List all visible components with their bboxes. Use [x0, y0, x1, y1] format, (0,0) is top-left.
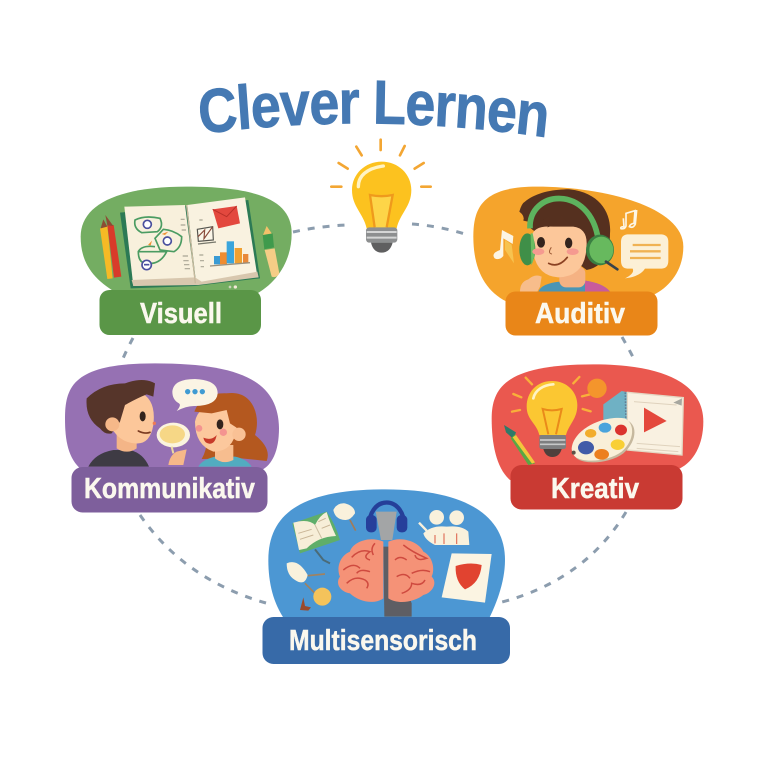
- label: Kreativ: [510, 465, 682, 510]
- label: Kommunikativ: Kommunikativ: [84, 473, 255, 505]
- icon: central light bulb: [331, 140, 431, 253]
- label: Auditiv: [506, 292, 658, 336]
- label: Visuell: [100, 290, 261, 335]
- illustration: open book and pencils: [81, 187, 292, 302]
- illustration: brain with senses: [268, 489, 505, 620]
- title: Clever Lernen: [200, 80, 546, 138]
- panel: Kommunikativ: [65, 363, 279, 512]
- label: Multisensorisch: [262, 617, 510, 664]
- dashed connector ring: [121, 224, 636, 603]
- illustration: two people talking: [65, 363, 279, 470]
- panel: Kreativ: [492, 364, 703, 510]
- panel: Visuell: [81, 187, 292, 335]
- title: [200, 80, 546, 138]
- label: Visuell: Visuell: [140, 298, 222, 330]
- panel: Auditiv: [473, 187, 683, 336]
- label: Kommunikativ: [72, 467, 268, 512]
- illustration: boy with headphones: [473, 187, 683, 302]
- panel: Multisensorisch: [262, 489, 510, 664]
- illustration: bulb, palette and video: [492, 364, 703, 480]
- label: Auditiv: Auditiv: [535, 298, 625, 330]
- label: Multisensorisch: Multisensorisch: [289, 625, 477, 657]
- label: Kreativ: Kreativ: [551, 473, 639, 505]
